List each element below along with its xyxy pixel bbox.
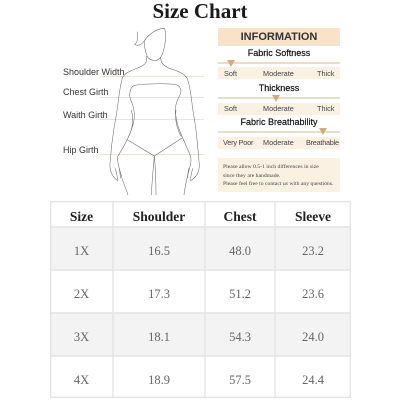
table header row: Size: [70, 208, 93, 224]
breathability scale: Moderate: [263, 138, 294, 147]
size table: [50, 201, 351, 398]
table header row: Sleeve: [295, 208, 331, 224]
breathability scale: [218, 128, 340, 149]
thickness scale: [218, 95, 340, 115]
information heading: [218, 28, 340, 46]
row 2X: 17.3: [148, 287, 170, 301]
row 3X: 18.1: [148, 330, 170, 344]
row 2X: 23.6: [302, 287, 324, 301]
label: chest girth: Chest Girth: [63, 87, 109, 97]
row 1X: 48.0: [229, 244, 251, 258]
row 2X: 2X: [74, 287, 89, 301]
label: hip girth: Hip Girth: [63, 145, 99, 155]
label: waist girth: Waith Girth: [63, 110, 108, 120]
thickness scale: Moderate: [263, 104, 294, 113]
table header row: Shoulder: [133, 208, 185, 224]
row 4X: 18.9: [148, 372, 170, 386]
note box: [218, 158, 340, 192]
row 3X: 3X: [74, 330, 89, 344]
softness scale: [218, 60, 340, 79]
row 1X: 16.5: [148, 244, 170, 258]
heading: fabric softness: Fabric Softness: [248, 48, 310, 58]
softness scale: Soft: [224, 69, 237, 78]
label: shoulder width: Shoulder Width: [63, 67, 125, 77]
row 4X: 4X: [74, 372, 89, 386]
row 4X: 24.4: [302, 372, 324, 386]
thickness scale: Thick: [317, 104, 334, 113]
row 1X: [50, 227, 351, 270]
row 4X: [74, 372, 324, 386]
panel: information: [218, 28, 340, 192]
row 1X: 23.2: [302, 244, 324, 258]
measurement lines: [100, 76, 204, 155]
body figure diagram: [100, 28, 204, 195]
row 3X: 24.0: [302, 330, 324, 344]
breathability scale: Very Poor: [223, 138, 253, 147]
breathability scale: Breathable: [306, 138, 339, 147]
heading: thickness: Thickness: [259, 83, 299, 93]
row 4X: 57.5: [229, 372, 251, 386]
heading: fabric breathability: Fabric Breathability: [240, 117, 318, 127]
note box: Please allow 0.5-1 inch differences in size: [223, 164, 319, 170]
row 3X: 54.3: [229, 330, 251, 344]
note box: Please feel free to contact us with any questions.: [223, 181, 333, 187]
body outline: [110, 28, 199, 195]
softness scale: Moderate: [263, 69, 294, 78]
softness scale: Thick: [317, 69, 334, 78]
information heading: INFORMATION: [241, 31, 317, 43]
table header row: Chest: [224, 208, 256, 224]
thickness scale: Soft: [224, 104, 237, 113]
row 2X: [74, 287, 324, 301]
row 2X: 51.2: [229, 287, 251, 301]
table header row: [70, 208, 331, 224]
note box: since they are handmade.: [223, 172, 280, 178]
row 1X: 1X: [74, 244, 89, 258]
row 3X: [50, 313, 351, 356]
